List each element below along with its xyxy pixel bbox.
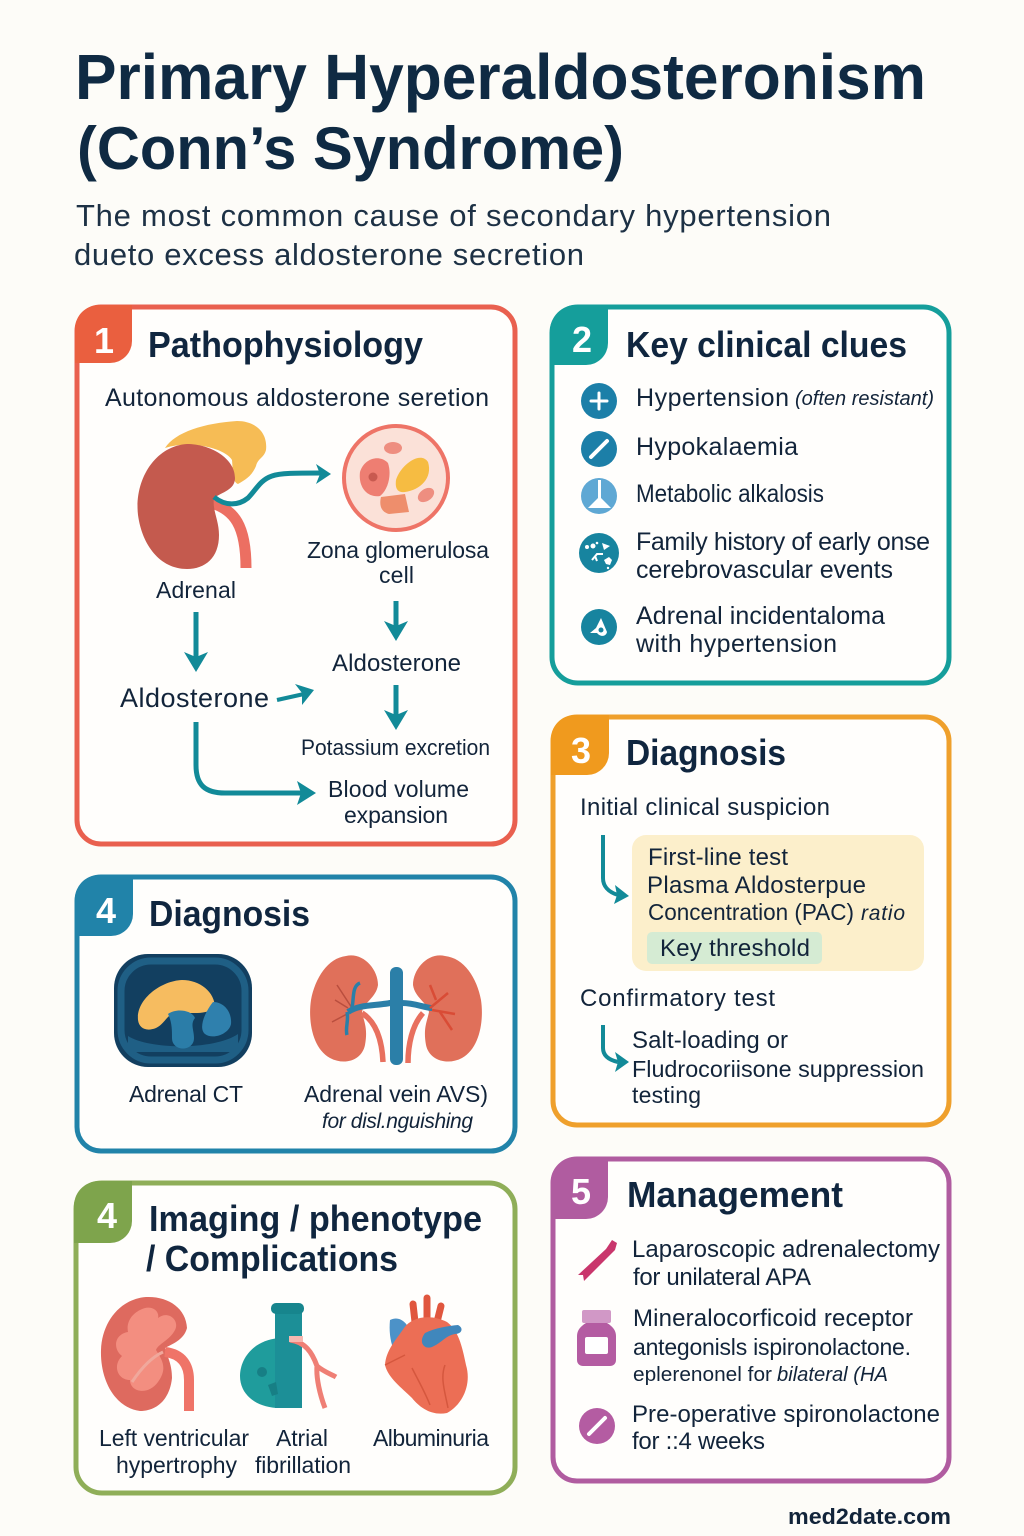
label: blood volume expansion: expansion: [344, 802, 448, 828]
item: family history: Family history of early onse: [636, 528, 930, 556]
badge number 5: 5: [571, 1171, 591, 1212]
label: adrenal vein sampling: for disl.nguishing: [322, 1110, 473, 1133]
callout: first-line test: [632, 835, 924, 971]
panel: 5 management: [551, 1157, 949, 1481]
label: left ventricular hypertrophy: hypertrophy: [116, 1452, 238, 1478]
callout: first-line test: First-line test: [648, 844, 788, 871]
callout: first-line test: Concentration (PAC): [648, 899, 854, 925]
label: atrial fibrillation: [255, 1425, 351, 1478]
item: family history: [579, 528, 930, 584]
icon: heart: [385, 1298, 468, 1414]
key threshold pill: Key threshold: [660, 935, 810, 962]
text: salt-loading: [632, 1027, 924, 1108]
subtitle: The most common cause of secondary hypertension: [76, 198, 831, 233]
item: mineralocorticoid antagonists: antegonisls ispironolactone.: [633, 1334, 911, 1360]
label: adrenal: Adrenal: [156, 577, 236, 603]
icon: zona glomerulosa cell: [344, 426, 448, 530]
item: pre-operative spironolactone: Pre-operative spironolactone: [632, 1401, 940, 1428]
item: adrenal incidentaloma: Adrenal incidentaloma: [636, 602, 885, 630]
arrow: confirmatory: [603, 1025, 629, 1072]
label: left ventricular hypertrophy: [99, 1425, 249, 1478]
heading: imaging phenotype complications: Imaging / phenotype: [149, 1198, 482, 1239]
item: mineralocorticoid antagonists: [577, 1305, 913, 1386]
item: adrenal incidentaloma: [581, 602, 885, 658]
label: blood volume expansion: [328, 776, 469, 828]
callout: first-line test: Plasma Aldosterpue: [647, 872, 866, 899]
subtitle: dueto excess aldosterone secretion: [74, 237, 584, 272]
panel: 4 imaging phenotype complications: [74, 1181, 515, 1493]
item: mineralocorticoid antagonists: Mineralocorficoid receptor: [633, 1305, 913, 1332]
text: confirmatory test: Confirmatory test: [580, 985, 775, 1012]
item: adrenalectomy: [578, 1236, 940, 1291]
badge 4: [74, 1181, 132, 1243]
arrow: aldosterone to potassium: [384, 685, 408, 730]
heading: imaging phenotype complications: / Complications: [146, 1238, 398, 1279]
heading: key clinical clues: Key clinical clues: [626, 324, 907, 365]
badge 1: [75, 305, 132, 363]
heading: pathophysiology: Pathophysiology: [148, 324, 423, 365]
badge number 2: 2: [572, 319, 592, 360]
heading: imaging phenotype complications: [146, 1198, 482, 1279]
text: autonomous secretion: Autonomous aldosterone seretion: [105, 384, 489, 412]
badge 5: [551, 1157, 608, 1219]
text: salt-loading: testing: [632, 1082, 701, 1108]
item: metabolic alkalosis: Metabolic alkalosis: [636, 480, 824, 508]
badge 4: [75, 875, 133, 936]
label: adrenal vein sampling: [304, 1081, 488, 1133]
arrow: aldosterone link: [277, 684, 314, 705]
arrow: cell to aldosterone: [384, 601, 408, 641]
label: albuminuria: Albuminuria: [373, 1425, 489, 1451]
item: hypokalaemia: Hypokalaemia: [636, 433, 798, 461]
label: zona glomerulosa cell: Zona glomerulosa: [307, 537, 489, 563]
label: zona glomerulosa cell: cell: [379, 562, 414, 588]
text: salt-loading: Fludrocoriisone suppression: [632, 1056, 924, 1082]
panel: 1 pathophysiology: [75, 305, 515, 844]
item: hypertension: Hypertension: [636, 384, 789, 412]
item: adrenalectomy: Laparoscopic adrenalectomy: [632, 1236, 940, 1263]
text: salt-loading: Salt-loading or: [632, 1027, 788, 1054]
icon: atrial fibrillation: [240, 1303, 336, 1408]
label: adrenal vein sampling: Adrenal vein AVS): [304, 1081, 488, 1107]
item: pre-operative spironolactone: [579, 1401, 940, 1455]
panel: 2 key clinical clues: [550, 305, 949, 683]
heading: diagnosis: Diagnosis: [149, 893, 310, 934]
arrow: adrenal to aldosterone: [184, 612, 208, 672]
arrow: aldosterone to blood volume: [196, 722, 316, 805]
badge number 1: 1: [94, 320, 114, 361]
icon: adrenal and kidney: [138, 421, 331, 569]
subtitle: [74, 198, 831, 272]
text: initial clinical suspicion: Initial clinical suspicion: [580, 794, 830, 821]
label: potassium excretion: Potassium excretion: [301, 735, 490, 760]
label: blood volume expansion: Blood volume: [328, 776, 469, 802]
label: aldosterone right: Aldosterone: [332, 650, 461, 677]
item: metabolic alkalosis: [581, 478, 824, 514]
item: family history: cerebrovascular events: [636, 556, 893, 584]
arrow: suspicion to first-line: [603, 835, 629, 904]
callout: first-line test: ratio: [861, 902, 905, 925]
badge number 4: 4: [96, 890, 116, 931]
title: Primary Hyperaldosteronism: [75, 41, 926, 113]
badge number 4: 4: [97, 1195, 117, 1236]
label: atrial fibrillation: Atrial: [276, 1425, 328, 1451]
title: (Conn’s Syndrome): [77, 115, 624, 182]
icon: kidney: [101, 1297, 189, 1411]
label: adrenal CT: Adrenal CT: [129, 1081, 243, 1107]
label: left ventricular hypertrophy: Left ventricular: [99, 1425, 249, 1451]
panel: 4 diagnosis imaging: [75, 875, 515, 1151]
icon: adrenal CT: [114, 954, 252, 1067]
item: adrenalectomy: for unilateral APA: [633, 1264, 811, 1291]
badge number 3: 3: [571, 730, 591, 771]
item: mineralocorticoid antagonists: eplerenonel for: [633, 1364, 772, 1386]
item: pre-operative spironolactone: for ::4 weeks: [632, 1428, 765, 1455]
footer: source: med2date.com: [788, 1504, 951, 1529]
heading: diagnosis: Diagnosis: [626, 732, 786, 773]
badge 2: [550, 305, 608, 365]
item: mineralocorticoid antagonists: bilateral (HA: [777, 1364, 888, 1386]
heading: management: Management: [627, 1174, 843, 1215]
title: [75, 41, 926, 182]
badge 3: [551, 715, 609, 775]
label: atrial fibrillation: fibrillation: [255, 1452, 351, 1478]
label: aldosterone left: Aldosterone: [120, 683, 269, 713]
panel: 3 diagnosis: [551, 715, 949, 1125]
item: hypokalaemia: [581, 431, 798, 467]
item: hypertension: (often resistant): [795, 388, 934, 410]
item: adrenal incidentaloma: with hypertension: [635, 630, 837, 658]
item: hypertension: [581, 383, 934, 419]
label: zona glomerulosa cell: [307, 537, 489, 588]
icon: kidneys and vessels: [310, 955, 482, 1065]
